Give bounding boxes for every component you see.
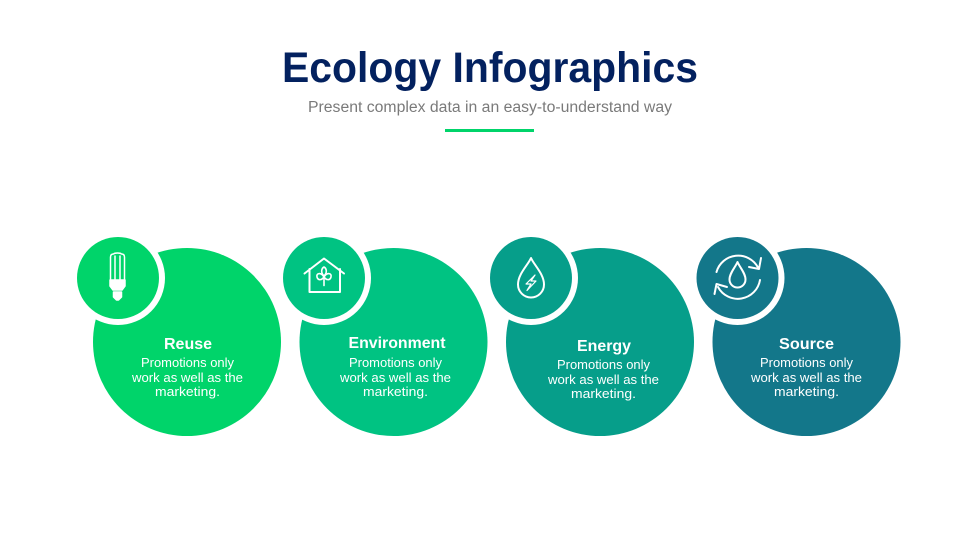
panel: source <box>690 231 900 436</box>
body text: energy: work as well as the <box>547 372 659 387</box>
body text: environment <box>339 355 451 399</box>
large circle: energy <box>506 248 694 436</box>
body text: source: Promotions only <box>760 355 853 370</box>
body text: source <box>750 355 862 399</box>
title: Ecology Infographics <box>282 45 698 92</box>
body text: reuse: marketing. <box>155 384 220 399</box>
heading: reuse: Reuse <box>164 336 212 353</box>
body text: energy: marketing. <box>571 386 636 401</box>
icon badge: water cycle <box>690 231 784 325</box>
body text: environment: marketing. <box>363 384 428 399</box>
heading: source: Source <box>779 336 834 353</box>
body text: reuse <box>131 355 243 399</box>
large circle: reuse <box>93 248 281 436</box>
body text: reuse: work as well as the <box>131 370 243 385</box>
panel: energy <box>484 231 694 436</box>
subtitle: Present complex data in an easy-to-understand way <box>308 99 672 116</box>
title accent bar <box>445 129 534 132</box>
icon badge: drop with bolt <box>484 231 578 325</box>
icon badge: light bulb <box>71 231 165 325</box>
icon badge: house with plant <box>277 231 371 325</box>
heading: energy: Energy <box>577 338 631 355</box>
heading: environment: Environment <box>348 335 446 352</box>
body text: source: work as well as the <box>750 370 862 385</box>
body text: reuse: Promotions only <box>141 355 234 370</box>
body text: energy: Promotions only <box>557 357 650 372</box>
body text: environment: Promotions only <box>349 355 442 370</box>
panel: environment <box>277 231 488 436</box>
body text: environment: work as well as the <box>339 370 451 385</box>
body text: source: marketing. <box>774 384 839 399</box>
body text: energy <box>547 357 659 401</box>
large circle: environment <box>300 248 488 436</box>
panel: reuse <box>71 231 281 436</box>
large circle: source <box>712 248 900 436</box>
